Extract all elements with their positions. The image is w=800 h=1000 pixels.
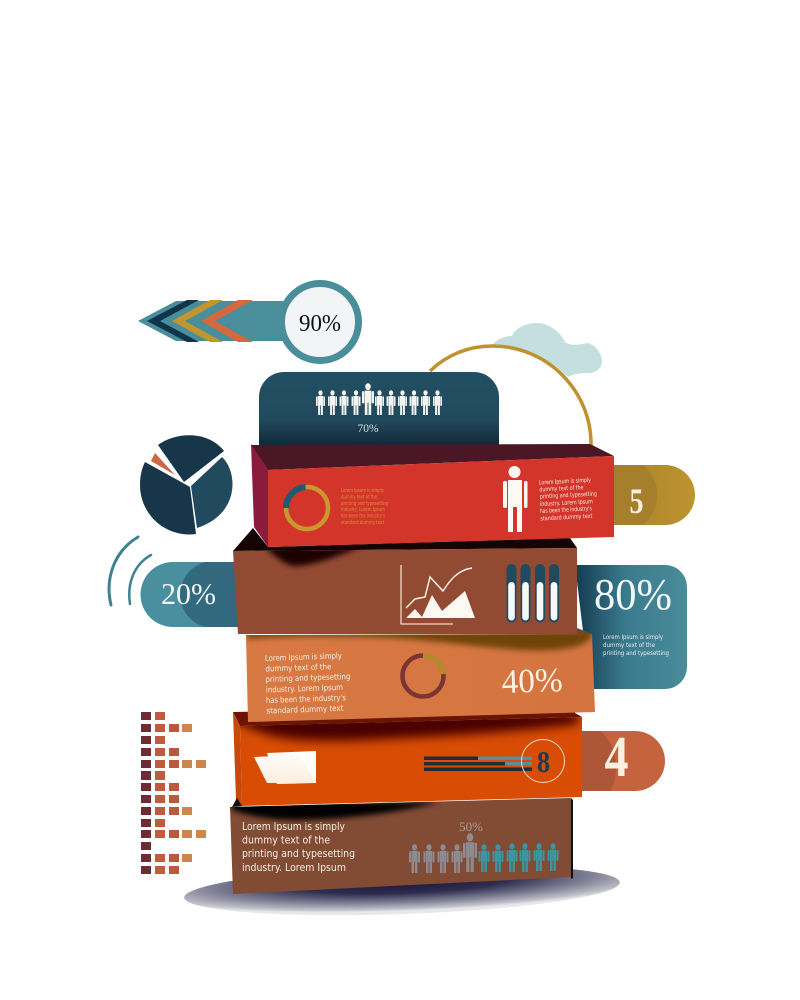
people row: white (316, 383, 442, 415)
pill: 20%: 20% (161, 576, 216, 611)
50% label: 50% (459, 819, 483, 834)
pill: 4: 4 (604, 724, 628, 789)
tube gauges (506, 564, 559, 622)
donut chart: red (286, 487, 328, 529)
bottom text: printing and typesetting (242, 848, 355, 860)
red panel right text: printing and typesetting (540, 491, 597, 500)
gold arc (430, 346, 591, 446)
box: brown with charts (233, 528, 577, 634)
red panel left text: industry. Lorem Ipsum (341, 507, 385, 513)
card text: Lorem Ipsum is simply (603, 634, 663, 641)
pill: 5 (600, 465, 695, 525)
red panel right text (539, 477, 597, 522)
arrow with 90% badge (138, 284, 358, 360)
card text (603, 634, 669, 657)
90% label: 90% (299, 311, 341, 337)
icon: folder (254, 751, 316, 784)
line chart icon (401, 565, 475, 624)
red panel left text (341, 488, 388, 526)
bottom text (242, 821, 355, 874)
box: orange with folder (232, 706, 582, 807)
pixel bars (141, 712, 206, 874)
bottom text: dummy text of the (242, 834, 330, 846)
badge: 8 (522, 740, 564, 782)
70% label: 70% (357, 423, 379, 435)
badge: 8: 8 (537, 744, 550, 779)
signal arcs (109, 537, 151, 605)
people row: grey and teal (409, 833, 558, 873)
red panel left text: dummy text of the (341, 494, 377, 500)
bottom text: Lorem Ipsum is simply (242, 821, 345, 833)
red panel left text: standard dummy text (341, 520, 385, 526)
red panel left text: Lorem Ipsum is simply (341, 488, 385, 494)
panel: 80% card: 80% (594, 570, 672, 619)
box: light orange (246, 628, 595, 722)
pill: 20% (140, 562, 240, 627)
red panel right text: Lorem Ipsum is simply (539, 477, 591, 486)
light orange text: dummy text of the (265, 662, 332, 673)
40% label: 40% (501, 662, 563, 701)
donut chart: light orange (402, 655, 444, 696)
bottom text: industry. Lorem Ipsum (242, 862, 346, 874)
red panel right text: has been the industry's (540, 505, 592, 515)
panel: 70% people card (259, 372, 499, 445)
cloud (492, 323, 602, 377)
card text: dummy text of the (603, 642, 655, 649)
light orange text: standard dummy text (266, 704, 344, 715)
light orange text (265, 651, 351, 715)
light orange text: industry. Lorem Ipsum (266, 683, 343, 694)
red panel left text: printing and typesetting (341, 501, 388, 507)
pill: 4 (575, 724, 665, 791)
red panel right text: standard dummy text (540, 513, 593, 522)
infographic (108, 280, 695, 915)
panel: 80% card (575, 565, 687, 689)
icon: person (503, 466, 528, 532)
light orange text: printing and typesetting (265, 672, 351, 684)
red panel right text: dummy text of the (539, 484, 584, 493)
red panel left text: has been the industry's (341, 514, 385, 520)
box: bottom brown (230, 798, 573, 894)
box: red top (251, 444, 614, 547)
card text: printing and typesetting (603, 650, 669, 657)
light orange text: Lorem Ipsum is simply (265, 651, 342, 663)
progress bars (424, 756, 532, 771)
red panel right text: industry. Lorem Ipsum (540, 498, 593, 508)
pie chart (140, 435, 232, 534)
shadow ellipse (183, 858, 621, 922)
light orange text: has been the industry's (266, 693, 346, 705)
pill: 5: 5 (630, 481, 644, 521)
